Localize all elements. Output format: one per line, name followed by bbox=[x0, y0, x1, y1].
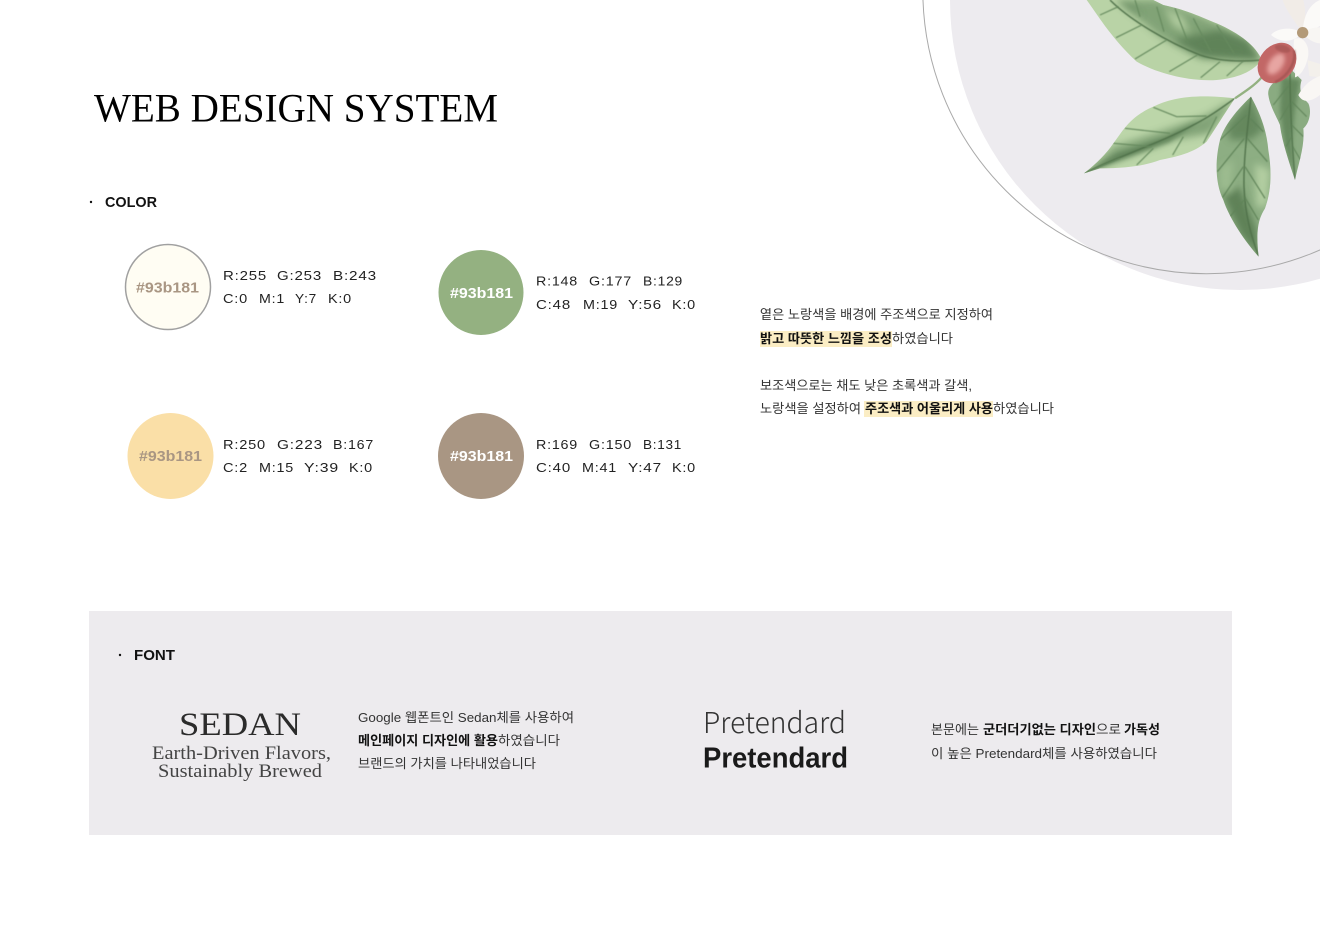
swatch: yellow: M:15 bbox=[259, 460, 294, 475]
swatch: cream: K:0 bbox=[328, 291, 352, 306]
swatch: yellow: C:2 bbox=[223, 460, 248, 475]
swatch: green: K:0 bbox=[672, 297, 696, 312]
swatch: brown: G:150 bbox=[589, 437, 632, 452]
illustration: coffee branch bbox=[1084, 0, 1320, 257]
swatch: brown: K:0 bbox=[672, 460, 696, 475]
text block: Pretendard description bbox=[931, 722, 1160, 761]
font sample: Sedan: Earth-Driven Flavors, bbox=[152, 743, 331, 764]
icon: flower bbox=[1271, 0, 1320, 101]
text block: Pretendard description: 으로 bbox=[1096, 722, 1121, 737]
text block: Sedan description bbox=[358, 710, 574, 771]
swatch: green bbox=[438, 250, 696, 335]
panel: font bbox=[89, 611, 1232, 835]
text block: Pretendard description: 이 높은 Pretendard체를 사용하였습니다 bbox=[931, 746, 1157, 761]
background circle bbox=[950, 0, 1320, 290]
text block: Pretendard description: 본문에는 bbox=[931, 722, 979, 737]
text block: color description: 노랑색을 설정하여 bbox=[760, 401, 861, 416]
icon: right leaf bbox=[1268, 68, 1310, 180]
icon: stem bbox=[1235, 77, 1262, 98]
text block: color description bbox=[760, 307, 1054, 417]
text block: color description: 보조색으로는 채도 낮은 초록색과 갈색, bbox=[760, 378, 972, 393]
font sample: Pretendard: Pretendard bbox=[703, 700, 846, 742]
text block: Pretendard description: 군더더기없는 디자인 bbox=[983, 722, 1096, 737]
swatch: cream: Y:7 bbox=[295, 291, 317, 306]
text block: color description: 하였습니다 bbox=[993, 401, 1054, 416]
text block: Sedan description: 하였습니다 bbox=[498, 733, 560, 748]
font sample: Pretendard: Pretendard bbox=[703, 742, 848, 774]
text block: Sedan description: Google 웹폰트인 Sedan체를 사용하여 bbox=[358, 710, 574, 725]
swatch: green: G:177 bbox=[589, 274, 632, 288]
swatch: green: R:148 bbox=[536, 274, 578, 288]
font sample: Sedan: SEDAN bbox=[179, 707, 301, 743]
swatch: brown: Y:47 bbox=[628, 460, 662, 475]
swatch: cream: M:1 bbox=[259, 291, 285, 306]
swatch: cream: G:253 bbox=[277, 268, 322, 283]
swatch: green: M:19 bbox=[583, 297, 618, 312]
text block: Pretendard description: 가독성 bbox=[1124, 722, 1160, 737]
swatch: cream bbox=[126, 244, 377, 330]
icon: top leaf bbox=[1087, 0, 1262, 80]
text block: color description: 옅은 노랑색을 배경에 주조색으로 지정하여 bbox=[760, 307, 993, 322]
text block: color description: 하였습니다 bbox=[892, 331, 953, 346]
swatch: green: Y:56 bbox=[628, 297, 662, 312]
font sample: Sedan bbox=[152, 707, 331, 782]
heading: color: COLOR bbox=[105, 194, 157, 211]
icon: center leaf bbox=[1217, 97, 1271, 257]
text block: Sedan description: 브랜드의 가치를 나타내었습니다 bbox=[358, 756, 536, 771]
swatch: yellow: R:250 bbox=[223, 437, 266, 452]
swatch: green: #93b181 bbox=[450, 285, 513, 302]
font sample: Sedan: Sustainably Brewed bbox=[158, 761, 323, 782]
swatch: brown: M:41 bbox=[582, 460, 617, 475]
swatch: brown: #93b181 bbox=[450, 448, 513, 465]
font sample: Pretendard bbox=[703, 700, 848, 774]
swatch: brown: B:131 bbox=[643, 437, 682, 452]
swatch: yellow: #93b181 bbox=[139, 448, 202, 465]
swatch: brown: R:169 bbox=[536, 437, 578, 452]
swatch: cream: R:255 bbox=[223, 268, 267, 283]
swatch: brown bbox=[438, 413, 696, 499]
swatch: cream: #93b181 bbox=[136, 280, 199, 296]
text block: color description: 주조색과 어울리게 사용 bbox=[865, 401, 993, 416]
swatch: yellow: B:167 bbox=[333, 437, 374, 452]
swatch: yellow: Y:39 bbox=[304, 460, 339, 475]
swatch: yellow: G:223 bbox=[277, 437, 323, 452]
swatch: cream: B:243 bbox=[333, 268, 377, 283]
icon: coffee berry bbox=[1250, 35, 1304, 91]
icon: left leaf bbox=[1084, 96, 1235, 173]
text block: color description: 밝고 따뜻한 느낌을 조성 bbox=[760, 331, 892, 346]
heading: font: FONT bbox=[134, 647, 175, 664]
title: WEB DESIGN SYSTEM bbox=[94, 86, 498, 130]
circle outline bbox=[923, 0, 1320, 274]
swatch: green: B:129 bbox=[643, 274, 683, 288]
swatch: brown: C:40 bbox=[536, 460, 571, 475]
swatch: cream: C:0 bbox=[223, 291, 248, 306]
swatch: yellow: K:0 bbox=[349, 460, 373, 475]
swatch: yellow bbox=[128, 413, 374, 499]
swatch: green: C:48 bbox=[536, 297, 571, 312]
text block: Sedan description: 메인페이지 디자인에 활용 bbox=[358, 733, 498, 748]
